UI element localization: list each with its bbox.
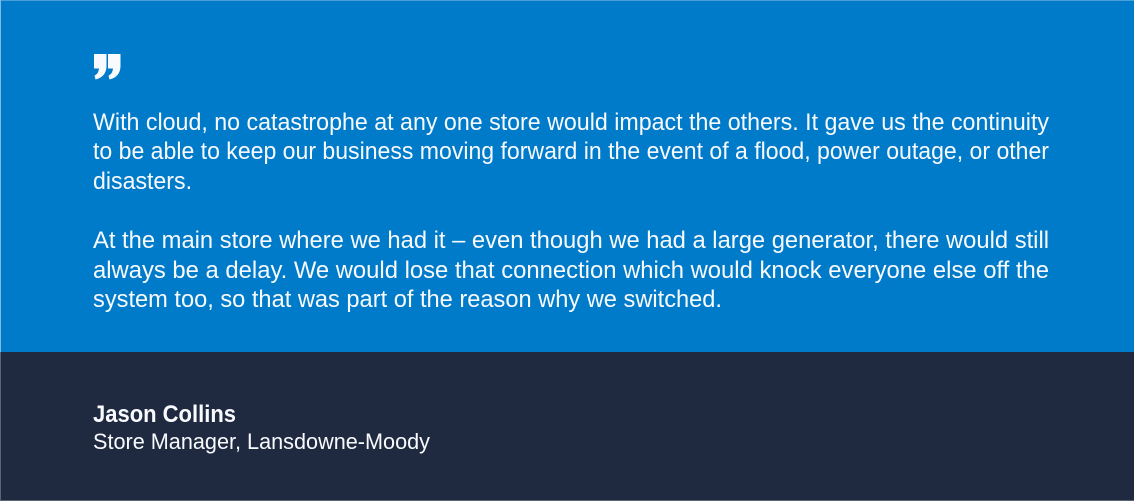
- icon: closing quotation mark: [94, 54, 120, 80]
- text block: first quote paragraph: disasters.: [93, 168, 192, 195]
- text block: second quote paragraph: system too, so that was part of the reason why we switched.: [93, 286, 722, 313]
- text block: first quote paragraph: With cloud, no catastrophe at any one store would impact the others. It gave us the continuity: [93, 109, 1049, 136]
- heading: speaker name: Jason Collins: [93, 401, 236, 428]
- panel: attribution background: [0, 352, 1134, 501]
- text block: speaker role: Store Manager, Lansdowne-Moody: [93, 429, 430, 454]
- text block: second quote paragraph: At the main store where we had it – even though we had a large generator, there would still: [93, 227, 1049, 254]
- panel: quote background: [0, 0, 1134, 352]
- text block: first quote paragraph: to be able to keep our business moving forward in the event of a flood, power outage, or other: [93, 138, 1049, 165]
- text block: second quote paragraph: [93, 227, 1049, 313]
- text block: first quote paragraph: [93, 109, 1049, 195]
- text block: second quote paragraph: always be a delay. We would lose that connection which would knock everyone else off the: [93, 257, 1049, 284]
